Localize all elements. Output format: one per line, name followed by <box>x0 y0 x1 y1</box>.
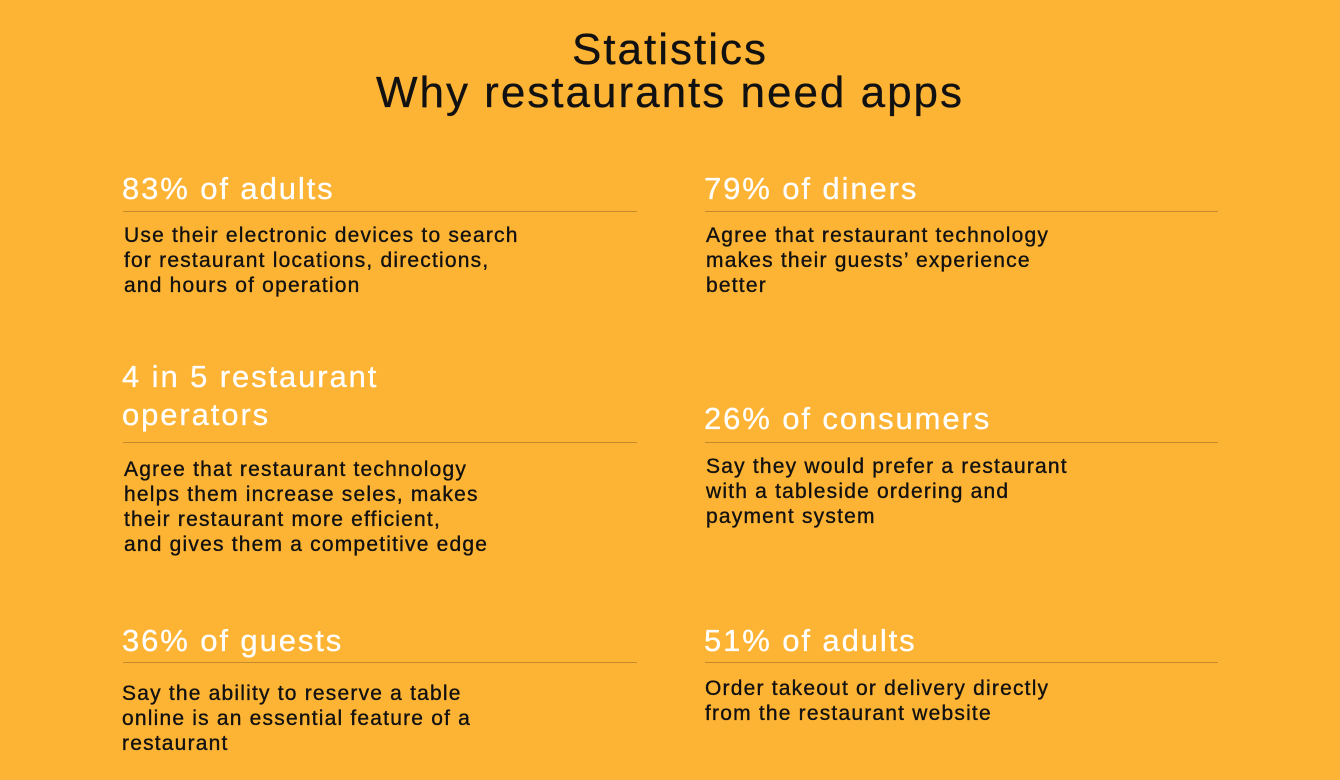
panel: 51% of adults <box>704 623 1218 725</box>
body text: better <box>706 274 767 297</box>
body text: Say they would prefer a restaurant <box>706 455 1068 478</box>
body text <box>124 458 488 556</box>
panel: 79% of diners <box>704 171 1218 297</box>
heading: 26% of consumers <box>704 401 991 436</box>
body text: and hours of operation <box>124 274 361 297</box>
heading: 83% of adults <box>122 171 335 206</box>
panel: 83% of adults <box>122 171 637 297</box>
body text: Use their electronic devices to search <box>124 224 519 247</box>
panel: 26% of consumers <box>704 401 1218 528</box>
panel: 36% of guests <box>122 623 637 755</box>
body text: payment system <box>706 505 876 528</box>
title: Why restaurants need apps <box>376 68 964 117</box>
body text: Agree that restaurant technology <box>124 458 467 481</box>
body text <box>124 224 519 297</box>
title: Statistics <box>572 25 768 74</box>
title <box>376 25 964 117</box>
body text: online is an essential feature of a <box>122 707 471 730</box>
body text: Order takeout or delivery directly <box>705 677 1049 700</box>
heading: 4 in 5 restaurant <box>122 359 378 394</box>
body text <box>705 677 1049 725</box>
heading: 79% of diners <box>704 171 918 206</box>
panel: 4 in 5 restaurant operators <box>122 359 637 556</box>
body text: makes their guests’ experience <box>706 249 1031 272</box>
body text: restaurant <box>122 732 229 755</box>
body text: with a tableside ordering and <box>706 480 1009 503</box>
body text: from the restaurant website <box>705 702 992 725</box>
body text: Agree that restaurant technology <box>706 224 1049 247</box>
body text <box>122 682 471 755</box>
body text: helps them increase seles, makes <box>124 483 479 506</box>
body text <box>706 224 1049 297</box>
body text: and gives them a competitive edge <box>124 533 488 556</box>
body text: their restaurant more efficient, <box>124 508 441 531</box>
body text: Say the ability to reserve a table <box>122 682 462 705</box>
body text <box>706 455 1068 528</box>
heading <box>122 359 378 432</box>
heading: operators <box>122 397 270 432</box>
body text: for restaurant locations, directions, <box>124 249 489 272</box>
heading: 36% of guests <box>122 623 343 658</box>
heading: 51% of adults <box>704 623 917 658</box>
